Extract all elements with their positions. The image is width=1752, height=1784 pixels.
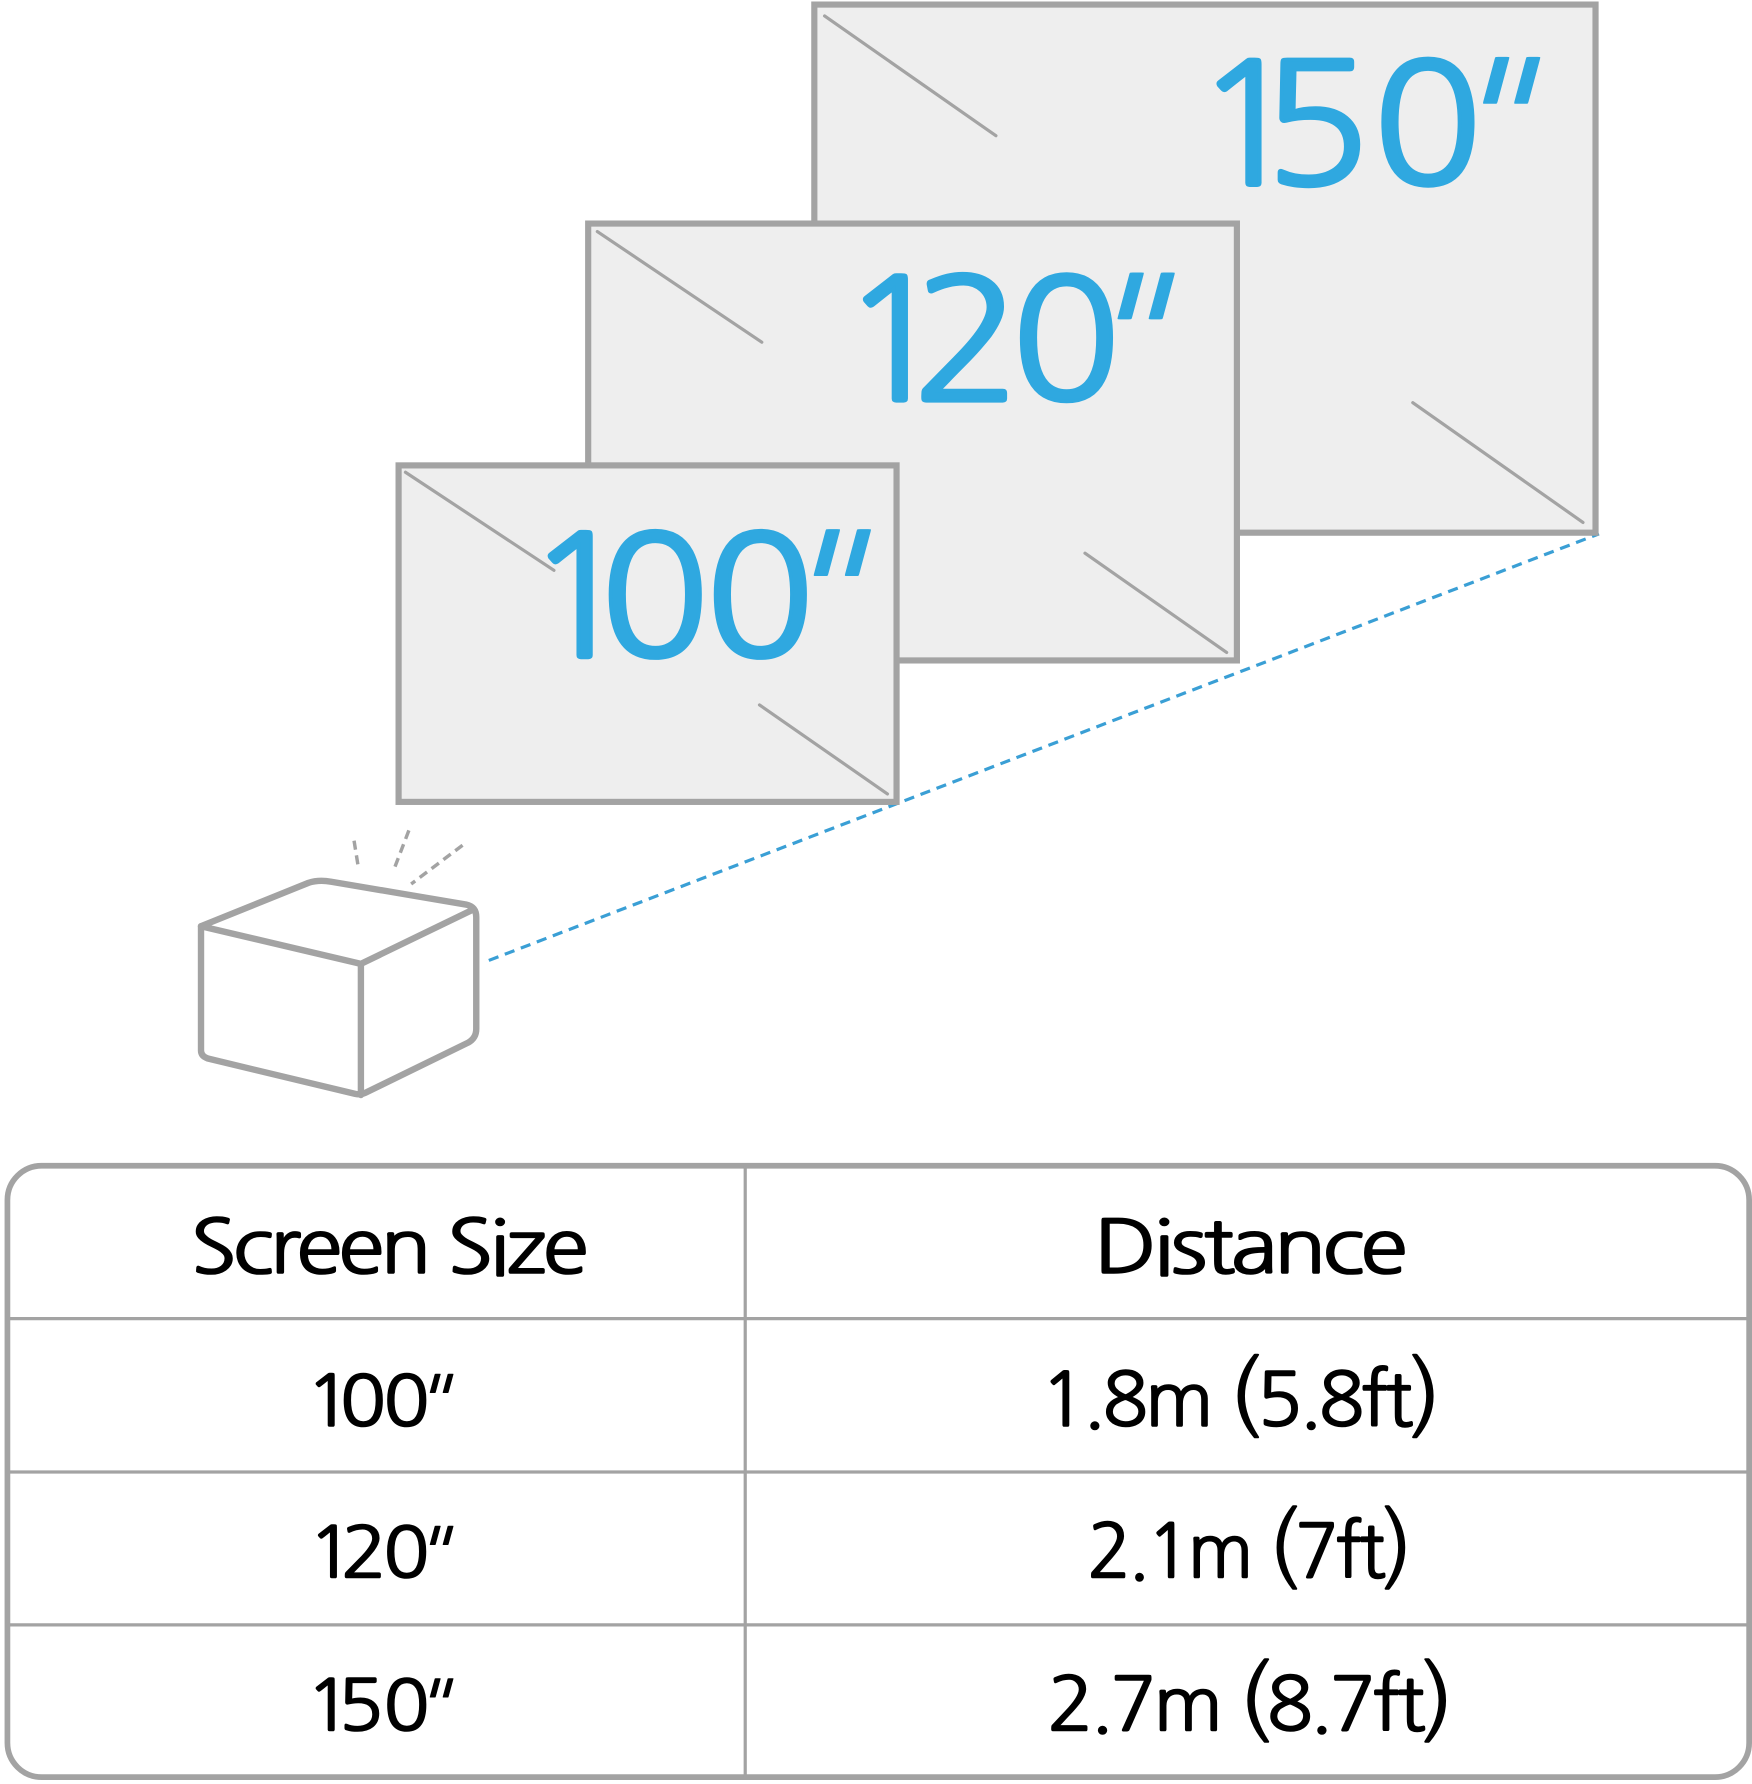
cell: 2.7m: 2.7m (8.7ft)	[1047, 1657, 1450, 1743]
label: 150 inch: "	[1430, 36, 1541, 239]
panel: 100 inch screen	[399, 465, 897, 802]
label: 150 inch	[1192, 36, 1541, 239]
cell: 120 inch: "	[408, 1517, 454, 1600]
heading: distance: Distance	[1094, 1209, 1405, 1284]
panel: 150 inch screen	[814, 5, 1596, 533]
cell: 1.8m: 1.8m (5.8ft)	[1040, 1353, 1438, 1439]
cell: 2.1m: 2.1m (7ft)	[1087, 1505, 1409, 1591]
cell: 120 inch: 120	[308, 1517, 430, 1588]
heading: screen size: Screen Size	[191, 1209, 586, 1284]
panel: 120 inch screen	[588, 224, 1237, 660]
label: 100 inch: 100	[524, 513, 815, 682]
cell: 150 inch: 150	[306, 1670, 430, 1741]
label: 150 inch: 150	[1192, 41, 1483, 210]
label: 100 inch: "	[761, 508, 872, 711]
icon: projector cube	[201, 881, 476, 1095]
label: 120 inch: 120	[839, 256, 1121, 425]
label: 120 inch: "	[1064, 251, 1176, 454]
dashed projection line	[489, 534, 1599, 960]
label: 100 inch	[524, 508, 872, 711]
cell: 100 inch: 100	[306, 1365, 430, 1436]
table	[7, 1166, 1749, 1777]
label: 120 inch	[839, 251, 1176, 454]
icon: light rays	[354, 830, 463, 884]
cell: 100 inch: "	[408, 1365, 454, 1448]
cell: 150 inch: "	[408, 1670, 454, 1753]
